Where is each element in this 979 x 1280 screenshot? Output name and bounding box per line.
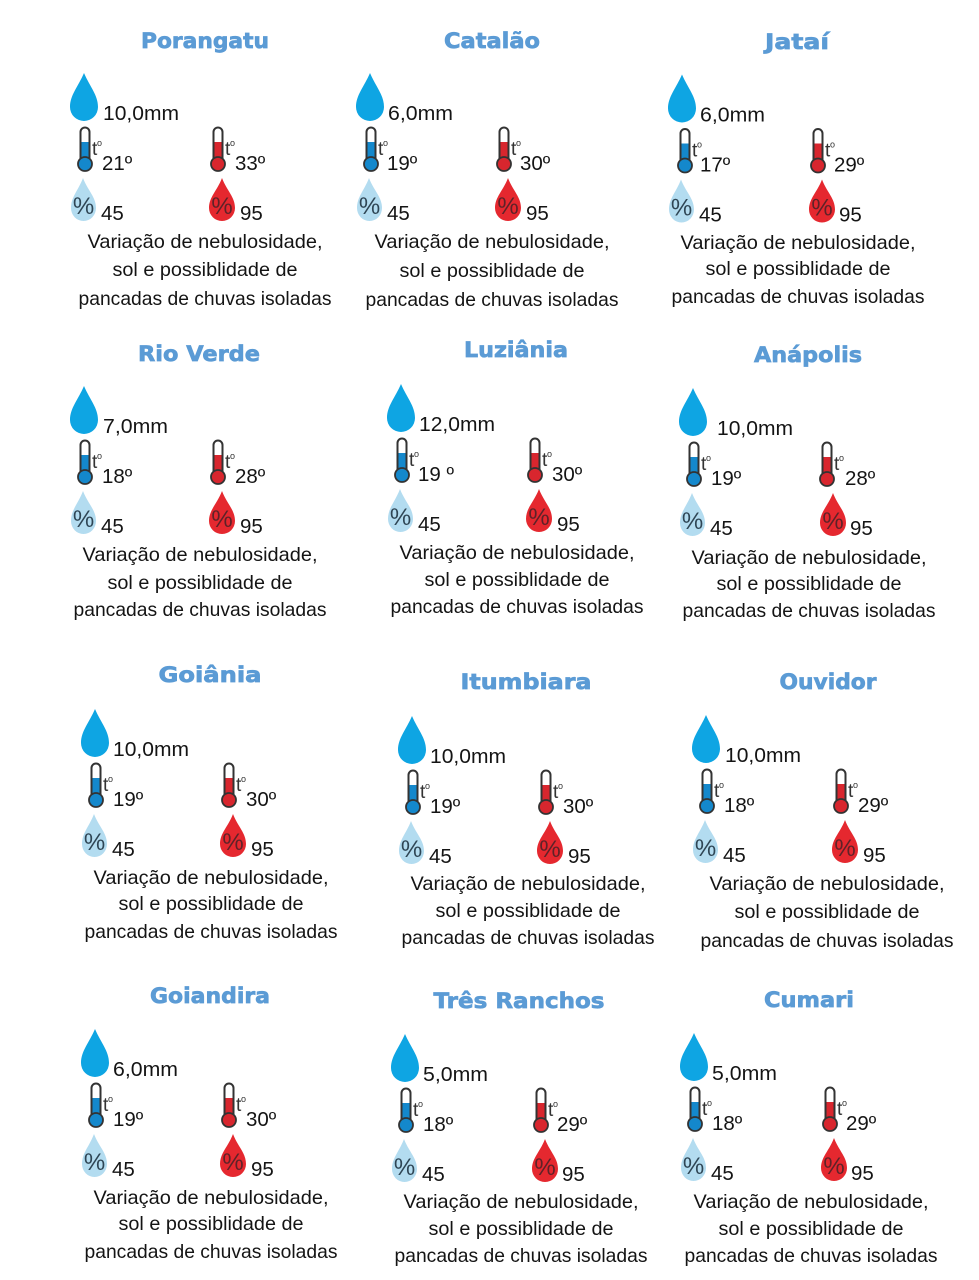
icon: max temperature: [528, 438, 552, 482]
rainfall value: 6,0mm: [113, 1058, 178, 1081]
icon: max temperature: [211, 128, 235, 171]
max temperature value: 30º: [246, 788, 277, 811]
rainfall value: 7,0mm: [103, 415, 168, 438]
icon: max humidity: [526, 489, 552, 532]
min temperature value: 19º: [430, 795, 461, 818]
heading: Itumbiara: Itumbiara: [460, 670, 592, 694]
description: [684, 1191, 938, 1267]
min humidity value: 45: [418, 513, 441, 536]
min temperature value: 19 º: [418, 463, 454, 486]
rainfall value: 10,0mm: [113, 738, 189, 761]
icon: rain drop: [668, 74, 696, 122]
icon: max humidity: [809, 180, 835, 222]
description: Variação de nebulosidade,: [710, 873, 944, 895]
description: sol e possiblidade de: [734, 901, 920, 923]
description: [84, 867, 338, 943]
min humidity value: 45: [101, 515, 124, 538]
rainfall value: 12,0mm: [419, 413, 495, 436]
min temperature value: 19º: [387, 152, 418, 175]
max humidity value: 95: [562, 1163, 585, 1186]
description: pancadas de chuvas isoladas: [402, 927, 655, 949]
heading: Porangatu: Porangatu: [141, 29, 269, 53]
icon: max temperature: [811, 129, 835, 172]
icon: rain drop: [680, 1033, 708, 1081]
max humidity value: 95: [526, 202, 549, 225]
icon: min temperature: [399, 1088, 423, 1132]
panel: Porangatu: [70, 29, 332, 310]
description: pancadas de chuvas isoladas: [84, 921, 338, 943]
description: sol e possiblidade de: [706, 258, 890, 280]
rainfall value: 10,0mm: [717, 417, 793, 440]
icon: max humidity: [832, 820, 858, 863]
description: Variação de nebulosidade,: [82, 544, 318, 566]
min temperature value: 18º: [724, 794, 755, 817]
max temperature value: 29º: [834, 154, 865, 176]
icon: min temperature: [89, 764, 113, 807]
icon: max temperature: [820, 442, 844, 486]
heading: Goiânia: Goiânia: [158, 663, 262, 687]
description: sol e possiblidade de: [436, 900, 620, 922]
heading: Três Ranchos: Três Ranchos: [434, 989, 604, 1013]
description: [402, 873, 655, 949]
heading: Goiandira: Goiandira: [150, 984, 270, 1008]
icon: max humidity: [532, 1139, 558, 1182]
min temperature value: 18º: [712, 1112, 743, 1135]
min humidity value: 45: [429, 845, 452, 868]
description: Variação de nebulosidade,: [694, 1191, 928, 1213]
description: pancadas de chuvas isoladas: [78, 288, 332, 310]
description: pancadas de chuvas isoladas: [682, 600, 936, 622]
icon: min temperature: [78, 440, 102, 484]
icon: max temperature: [534, 1088, 558, 1132]
description: [84, 1187, 338, 1263]
panel: Cumari: [680, 988, 938, 1267]
description: [74, 544, 327, 621]
min humidity value: 45: [723, 844, 746, 867]
rainfall value: 10,0mm: [725, 744, 801, 767]
description: pancadas de chuvas isoladas: [366, 289, 619, 311]
icon: min temperature: [78, 128, 102, 171]
max humidity value: 95: [850, 517, 873, 540]
description: [682, 547, 936, 622]
description: Variação de nebulosidade,: [94, 867, 328, 889]
min humidity value: 45: [112, 838, 135, 861]
min humidity value: 45: [422, 1163, 445, 1186]
max temperature value: 30º: [563, 795, 594, 818]
max humidity value: 95: [851, 1162, 874, 1185]
heading: Ouvidor: Ouvidor: [780, 670, 877, 694]
description: pancadas de chuvas isoladas: [672, 286, 925, 308]
icon: min humidity: [82, 814, 107, 857]
icon: min temperature: [89, 1084, 113, 1127]
max temperature value: 28º: [235, 465, 266, 488]
icon: max temperature: [539, 770, 563, 814]
icon: max temperature: [211, 440, 235, 484]
min humidity value: 45: [101, 202, 124, 225]
description: Variação de nebulosidade,: [88, 231, 322, 253]
description: pancadas de chuvas isoladas: [74, 599, 327, 621]
icon: min humidity: [680, 493, 705, 536]
min temperature value: 17º: [700, 154, 731, 176]
max temperature value: 30º: [246, 1108, 277, 1131]
icon: rain drop: [70, 73, 98, 121]
min temperature value: 19º: [113, 1108, 144, 1131]
min temperature value: 21º: [102, 152, 133, 175]
icon: rain drop: [391, 1034, 419, 1082]
heading: Catalão: Catalão: [444, 29, 540, 53]
max humidity value: 95: [240, 202, 263, 225]
description: sol e possiblidade de: [428, 1218, 614, 1240]
icon: max humidity: [821, 1138, 847, 1181]
heading: Luziânia: Luziânia: [464, 338, 568, 362]
max temperature value: 33º: [235, 152, 266, 175]
heading: Cumari: Cumari: [764, 988, 854, 1012]
icon: min temperature: [688, 1088, 712, 1131]
max humidity value: 95: [251, 1158, 274, 1181]
icon: max temperature: [222, 1084, 246, 1127]
icon: max humidity: [209, 178, 235, 221]
min humidity value: 45: [387, 202, 410, 225]
panel: Rio Verde: [70, 342, 327, 621]
max temperature value: 28º: [845, 467, 876, 490]
min humidity value: 45: [710, 517, 733, 540]
min humidity value: 45: [112, 1158, 135, 1181]
heading: Rio Verde: Rio Verde: [138, 342, 260, 366]
max humidity value: 95: [568, 845, 591, 868]
description: pancadas de chuvas isoladas: [390, 596, 644, 618]
icon: max humidity: [820, 493, 846, 536]
max temperature value: 30º: [520, 152, 551, 175]
min humidity value: 45: [699, 204, 722, 226]
description: Variação de nebulosidade,: [680, 232, 916, 254]
description: pancadas de chuvas isoladas: [700, 930, 954, 952]
description: [366, 231, 619, 311]
description: sol e possiblidade de: [718, 1218, 904, 1240]
icon: min temperature: [364, 128, 388, 171]
description: sol e possiblidade de: [118, 1213, 304, 1235]
rainfall value: 6,0mm: [700, 104, 765, 126]
rainfall value: 5,0mm: [423, 1063, 488, 1086]
description: sol e possiblidade de: [118, 893, 304, 915]
min temperature value: 19º: [113, 788, 144, 811]
description: sol e possiblidade de: [716, 573, 902, 595]
icon: max temperature: [823, 1088, 847, 1131]
max temperature value: 29º: [858, 794, 889, 817]
max temperature value: 30º: [552, 463, 583, 486]
icon: min humidity: [681, 1138, 706, 1181]
icon: rain drop: [692, 715, 720, 763]
rainfall value: 6,0mm: [388, 102, 453, 125]
heading: Jataí: Jataí: [763, 30, 831, 54]
description: [390, 542, 644, 618]
icon: max humidity: [220, 814, 246, 857]
icon: min humidity: [392, 1139, 417, 1182]
description: Variação de nebulosidade,: [692, 547, 926, 569]
min temperature value: 18º: [423, 1113, 454, 1136]
max temperature value: 29º: [846, 1112, 877, 1135]
max humidity value: 95: [251, 838, 274, 861]
icon: rain drop: [356, 73, 384, 121]
icon: rain drop: [81, 1029, 109, 1077]
icon: rain drop: [679, 388, 707, 436]
icon: min humidity: [357, 178, 382, 221]
panel: Jataí: [668, 30, 925, 308]
icon: min humidity: [82, 1134, 107, 1177]
icon: rain drop: [81, 709, 109, 757]
panel: Goiandira: [81, 984, 338, 1263]
max humidity value: 95: [839, 204, 862, 226]
panel: Luziânia: [387, 338, 644, 618]
icon: max humidity: [209, 491, 235, 534]
icon: max temperature: [834, 770, 858, 813]
rainfall value: 10,0mm: [103, 102, 179, 125]
panel: Ouvidor: [692, 670, 954, 952]
icon: max temperature: [497, 128, 521, 171]
heading: Anápolis: Anápolis: [754, 343, 862, 367]
description: Variação de nebulosidade,: [400, 542, 634, 564]
icon: min humidity: [71, 491, 96, 534]
icon: min humidity: [388, 489, 413, 532]
icon: min temperature: [406, 770, 430, 814]
panel: Anápolis: [679, 343, 936, 622]
icon: min humidity: [669, 180, 694, 222]
icon: min humidity: [693, 820, 718, 863]
description: pancadas de chuvas isoladas: [684, 1245, 938, 1267]
description: pancadas de chuvas isoladas: [394, 1245, 648, 1267]
rainfall value: 5,0mm: [712, 1062, 777, 1085]
max humidity value: 95: [863, 844, 886, 867]
icon: min temperature: [678, 129, 702, 172]
max humidity value: 95: [557, 513, 580, 536]
icon: max humidity: [495, 178, 521, 221]
description: Variação de nebulosidade,: [404, 1191, 638, 1213]
icon: min temperature: [700, 770, 724, 813]
description: sol e possiblidade de: [112, 259, 298, 281]
description: Variação de nebulosidade,: [94, 1187, 328, 1209]
description: [672, 232, 925, 308]
panel: Catalão: [356, 29, 619, 311]
description: sol e possiblidade de: [400, 260, 584, 282]
max humidity value: 95: [240, 515, 263, 538]
min humidity value: 45: [711, 1162, 734, 1185]
icon: max humidity: [220, 1134, 246, 1177]
icon: max humidity: [537, 821, 563, 864]
description: [394, 1191, 648, 1267]
icon: min humidity: [71, 178, 96, 221]
description: Variação de nebulosidade,: [374, 231, 610, 253]
min temperature value: 18º: [102, 465, 133, 488]
rainfall value: 10,0mm: [430, 745, 506, 768]
panel: Três Ranchos: [391, 989, 648, 1267]
icon: max temperature: [222, 764, 246, 807]
panel: Itumbiara: [398, 670, 655, 949]
description: [78, 231, 332, 310]
icon: rain drop: [387, 384, 415, 432]
min temperature value: 19º: [711, 467, 742, 490]
icon: rain drop: [70, 386, 98, 434]
panel: Goiânia: [81, 663, 338, 943]
description: sol e possiblidade de: [424, 569, 610, 591]
description: pancadas de chuvas isoladas: [84, 1241, 338, 1263]
description: [700, 873, 954, 952]
description: sol e possiblidade de: [108, 572, 292, 594]
icon: min temperature: [395, 438, 419, 482]
description: Variação de nebulosidade,: [410, 873, 646, 895]
icon: min temperature: [687, 442, 711, 486]
icon: min humidity: [399, 821, 424, 864]
max temperature value: 29º: [557, 1113, 588, 1136]
icon: rain drop: [398, 716, 426, 764]
